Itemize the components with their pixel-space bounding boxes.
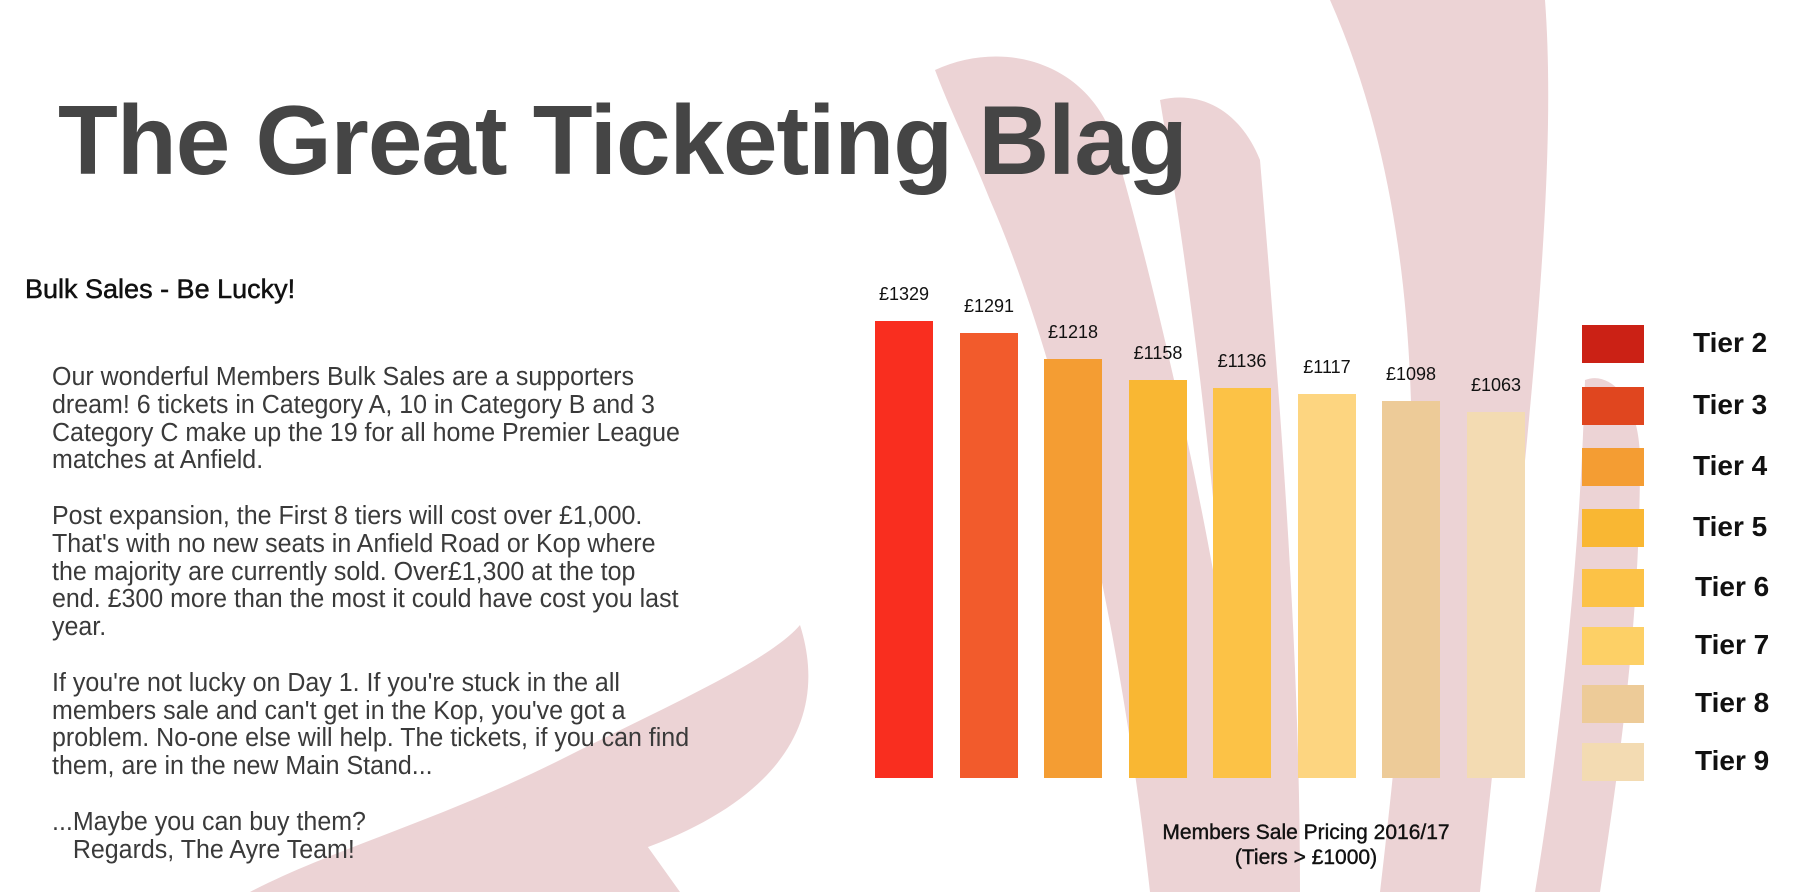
bar: Tier 9 — [1467, 412, 1525, 778]
legend: Tier 7 — [1695, 629, 1769, 660]
bar chart — [875, 284, 1525, 778]
legend: Tier 6 — [1695, 571, 1769, 602]
body text: problem. No-one else will help. The tickets, if you can find — [52, 724, 689, 752]
body text: matches at Anfield. — [52, 446, 263, 474]
body text: them, are in the new Main Stand... — [52, 752, 433, 780]
bar: Tier 2 — [875, 321, 933, 778]
body text: the majority are currently sold. Over£1,300 at the top — [52, 558, 635, 586]
chart caption — [1162, 821, 1450, 869]
chart caption: (Tiers > £1000) — [1235, 846, 1377, 869]
bar: Tier 3 — [960, 333, 1018, 778]
body text: Post expansion, the First 8 tiers will cost over £1,000. — [52, 502, 642, 530]
bar chart: £1329 — [879, 284, 929, 304]
legend: Tier 4 — [1693, 450, 1767, 481]
body text: Category C make up the 19 for all home Premier League — [52, 419, 680, 447]
legend: Tier 2 — [1693, 327, 1767, 358]
body text: end. £300 more than the most it could have cost you last — [52, 585, 679, 613]
body text: dream! 6 tickets in Category A, 10 in Category B and 3 — [52, 391, 655, 419]
body text — [52, 363, 689, 864]
body text: Regards, The Ayre Team! — [73, 836, 355, 864]
bar chart: £1136 — [1218, 351, 1266, 371]
bar chart: £1218 — [1048, 322, 1098, 342]
bar: Tier 8 — [1382, 401, 1440, 778]
body text: That's with no new seats in Anfield Road or Kop where — [52, 530, 655, 558]
bar chart: £1158 — [1134, 343, 1182, 363]
bar: Tier 5 — [1129, 380, 1187, 778]
bar chart: £1291 — [964, 296, 1014, 316]
body text: If you're not lucky on Day 1. If you're stuck in the all — [52, 669, 620, 697]
legend: Tier 9 — [1695, 745, 1769, 776]
bar chart: £1117 — [1303, 357, 1351, 377]
legend — [1582, 325, 1769, 781]
body text: ...Maybe you can buy them? — [52, 808, 366, 836]
bar: Tier 6 — [1213, 388, 1271, 778]
bar: Tier 4 — [1044, 359, 1102, 778]
body text: year. — [52, 613, 106, 641]
bar chart: £1063 — [1471, 375, 1521, 395]
chart caption: Members Sale Pricing 2016/17 — [1162, 821, 1450, 844]
bar: Tier 7 — [1298, 394, 1356, 778]
body text: Our wonderful Members Bulk Sales are a supporters — [52, 363, 634, 391]
bar chart: £1098 — [1386, 364, 1436, 384]
legend: Tier 8 — [1695, 687, 1769, 718]
legend: Tier 5 — [1693, 511, 1767, 542]
legend: Tier 3 — [1693, 389, 1767, 420]
subheading: Bulk Sales - Be Lucky! — [25, 274, 295, 304]
title: The Great Ticketing Blag — [58, 85, 1187, 195]
body text: members sale and can't get in the Kop, you've got a — [52, 697, 626, 725]
